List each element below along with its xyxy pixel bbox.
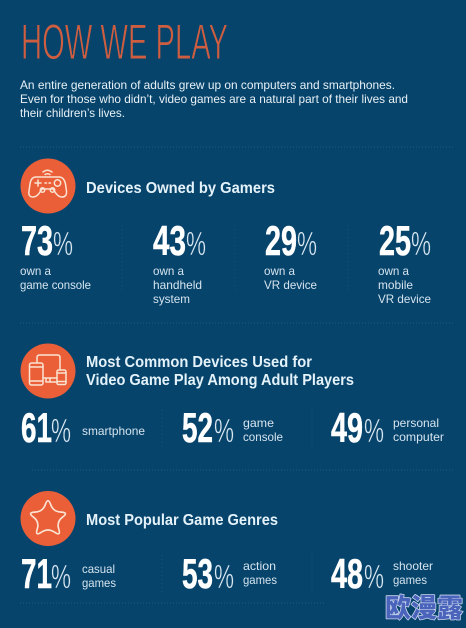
- stat: 25%: mobile: [378, 278, 413, 292]
- stat: 29%: [264, 217, 317, 292]
- stat: 53%: %: [214, 558, 234, 595]
- icon: devices: [20, 344, 76, 398]
- stat: 48%: [331, 550, 433, 597]
- stat: 61%: 61: [21, 404, 52, 451]
- stat: 73%: 73: [21, 217, 53, 264]
- heading: Most Popular Game Genres: [86, 512, 278, 529]
- stat: 73%: [20, 217, 91, 292]
- stat: 43%: %: [186, 225, 206, 262]
- panel: most common devices: [20, 344, 444, 451]
- heading: Most Common Devices Used for: [86, 354, 312, 371]
- stat: 52%: console: [243, 430, 283, 444]
- heading: Video Game Play Among Adult Players: [86, 372, 354, 389]
- stat: 49%: [331, 404, 444, 451]
- stat: 29%: own a: [264, 264, 295, 278]
- stat: 25%: [378, 217, 431, 306]
- intro text: Even for those who didn’t, video games are a natural part of their lives and: [20, 92, 408, 106]
- stat: 71%: [21, 550, 116, 597]
- stat: 43%: handheld: [153, 278, 202, 292]
- intro text: An entire generation of adults grew up on computers and smartphones.: [20, 78, 395, 92]
- stat: 29%: VR device: [264, 278, 317, 292]
- stat: 29%: %: [297, 225, 317, 262]
- stat: 49%: %: [364, 412, 384, 449]
- stat: 48%: %: [364, 558, 384, 595]
- stat: 43%: [153, 217, 206, 306]
- title: HOW WE PLAY: [21, 14, 228, 70]
- icon: game controller: [20, 158, 76, 214]
- stat: 25%: own a: [378, 264, 409, 278]
- stat: 53%: games: [243, 573, 277, 587]
- panel: most popular game genres: [20, 491, 433, 597]
- stat: 71%: %: [51, 558, 71, 595]
- stat: 52%: game: [243, 416, 274, 430]
- stat: 71%: 71: [21, 550, 52, 597]
- intro text: [20, 78, 408, 120]
- stat: 71%: casual: [82, 562, 115, 576]
- watermark: 欧漫露: [385, 593, 463, 623]
- intro text: their children’s lives.: [20, 106, 125, 120]
- stat: 53%: action: [243, 559, 276, 573]
- stat: 29%: 29: [265, 217, 297, 264]
- stat: 61%: smartphone: [82, 424, 145, 438]
- icon: star: [20, 491, 76, 546]
- stat: 61%: %: [51, 412, 71, 449]
- stat: 25%: %: [411, 225, 431, 262]
- stat: 52%: %: [214, 412, 234, 449]
- stat: 53%: 53: [182, 550, 213, 597]
- stat: 48%: shooter: [393, 559, 433, 573]
- stat: 73%: own a: [20, 264, 51, 278]
- stat: 43%: 43: [153, 217, 186, 264]
- stat: 53%: [182, 550, 277, 597]
- stat: 52%: 52: [182, 404, 213, 451]
- stat: 25%: 25: [379, 217, 411, 264]
- stat: 43%: system: [153, 292, 190, 306]
- stat: 61%: [21, 404, 145, 451]
- stat: 73%: game console: [20, 278, 91, 292]
- stat: 71%: games: [82, 576, 116, 590]
- stat: 48%: 48: [331, 550, 363, 597]
- stat: 25%: VR device: [378, 292, 431, 306]
- stat: 49%: computer: [393, 430, 444, 444]
- stat: 48%: games: [393, 573, 427, 587]
- stat: 49%: 49: [331, 404, 363, 451]
- stat: 49%: personal: [393, 416, 439, 430]
- heading: Devices Owned by Gamers: [86, 180, 275, 197]
- stat: 43%: own a: [153, 264, 184, 278]
- stat: 52%: [182, 404, 283, 451]
- panel: devices owned by gamers: [20, 158, 431, 306]
- stat: 73%: %: [53, 225, 73, 262]
- heading: [86, 354, 354, 389]
